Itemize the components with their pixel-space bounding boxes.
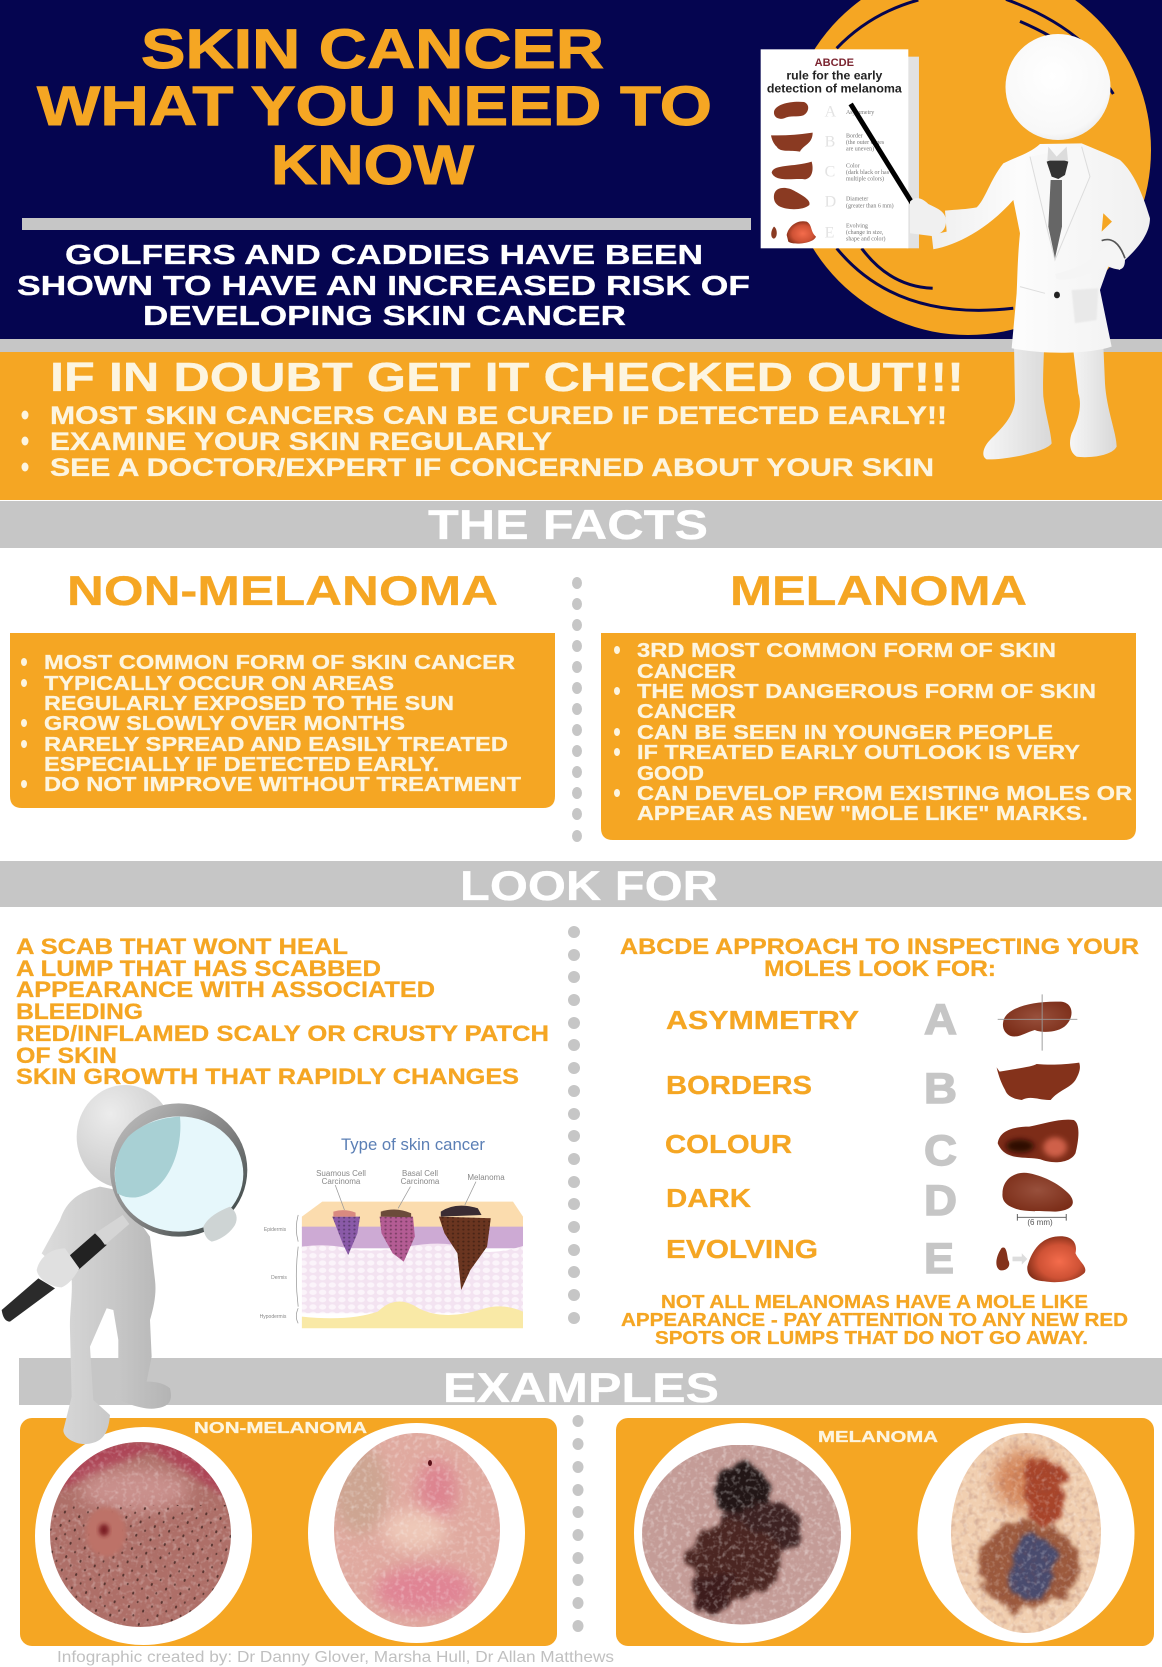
heading: abcde approach: MOLES LOOK FOR: — [764, 956, 996, 981]
panel: melanoma facts: 3RD MOST COMMON FORM OF SKIN — [637, 639, 1056, 662]
advice bullets: EXAMINE YOUR SKIN REGULARLY — [50, 428, 552, 456]
magnifier handle — [2, 1215, 129, 1322]
dotted divider: look for — [568, 926, 580, 1324]
heading: abcde approach — [620, 934, 1139, 981]
heading: non-melanoma: NON-MELANOMA — [67, 567, 498, 614]
diagram labels: Epidermis — [264, 1227, 287, 1233]
section bar: look for — [0, 861, 1162, 909]
panel: if in doubt — [0, 352, 1162, 500]
magnifier lens — [115, 1116, 243, 1232]
photo frame 3 — [634, 1423, 851, 1643]
advice bullets — [22, 402, 947, 482]
panel: melanoma facts: CANCER — [637, 700, 736, 723]
ABCDE chart held by doctor: (the outer edges — [846, 139, 885, 146]
ABCDE chart held by doctor: Diameter — [846, 197, 868, 203]
text block: signs to look for: APPEARANCE WITH ASSOCIATED — [16, 977, 435, 1002]
title: WHAT YOU NEED TO — [37, 74, 712, 137]
section bar: examples — [19, 1358, 1162, 1411]
label: melanoma: MELANOMA — [818, 1429, 938, 1446]
text block: signs to look for — [16, 934, 549, 1089]
ABCDE chart held by doctor: (change in size, — [846, 229, 884, 236]
doctor head — [1006, 34, 1110, 140]
panel: melanoma facts: IF TREATED EARLY OUTLOOK IS VERY — [637, 741, 1080, 764]
abcde row: borders: B — [924, 1065, 957, 1113]
note: not all melanomas: NOT ALL MELANOMAS HAVE A MOLE LIKE — [661, 1292, 1088, 1312]
subtitle: SHOWN TO HAVE AN INCREASED RISK OF — [17, 270, 750, 301]
figure: person with magnifying glass — [2, 1085, 247, 1444]
dotted divider: facts — [572, 577, 582, 842]
panel: non-melanoma facts: REGULARLY EXPOSED TO THE SUN — [44, 692, 454, 715]
abcde row: asymmetry: A — [924, 996, 957, 1044]
abcde row: asymmetry — [666, 994, 1077, 1051]
ABCDE chart held by doctor: Evolving — [846, 223, 868, 229]
note: not all melanomas: SPOTS OR LUMPS THAT DO NOT GO AWAY. — [655, 1328, 1088, 1348]
pointer stick — [851, 104, 913, 204]
panel: melanoma facts: APPEAR AS NEW "MOLE LIKE" MARKS. — [637, 802, 1088, 825]
panel: non-melanoma facts: ESPECIALLY IF DETECTED EARLY. — [44, 753, 439, 776]
label: non-melanoma: NON-MELANOMA — [194, 1420, 367, 1437]
section bar: examples: EXAMPLES — [443, 1364, 719, 1411]
figure hand holding handle — [37, 1248, 79, 1287]
heading: if in doubt: IF IN DOUBT GET IT CHECKED OUT!!! — [50, 354, 964, 400]
subtitle: GOLFERS AND CADDIES HAVE BEEN — [65, 239, 703, 270]
ABCDE chart held by doctor: (greater than 6 mm) — [846, 202, 894, 209]
advice bullets: SEE A DOCTOR/EXPERT IF CONCERNED ABOUT YOUR SKIN — [50, 454, 934, 482]
subtitle — [17, 239, 750, 331]
ABCDE chart held by doctor: E — [825, 224, 834, 241]
figure head — [77, 1085, 173, 1188]
abcde row: borders — [666, 1063, 1080, 1113]
panel: non-melanoma facts: TYPICALLY OCCUR ON AREAS — [44, 672, 394, 695]
diagram title: Type of skin cancer — [341, 1135, 485, 1154]
panel: non-melanoma facts: RARELY SPREAD AND EASILY TREATED — [44, 733, 508, 756]
ABCDE chart held by doctor: rule for the early — [786, 68, 883, 82]
diagram labels: Carcinoma — [322, 1177, 361, 1186]
divider strip — [0, 339, 1162, 352]
heading: abcde approach: ABCDE APPROACH TO INSPECTING YOUR — [620, 934, 1139, 959]
ABCDE chart held by doctor: detection of melanoma — [767, 82, 902, 96]
text block: signs to look for: BLEEDING — [16, 999, 143, 1024]
magnifier rim — [110, 1103, 247, 1237]
ABCDE chart held by doctor: Asymmetry — [846, 110, 874, 116]
photo frame 4 — [918, 1423, 1134, 1643]
ABCDE chart held by doctor: B — [825, 134, 835, 151]
figure body — [42, 1187, 171, 1444]
doctor hands — [910, 198, 946, 236]
panel: non-melanoma facts — [10, 633, 555, 808]
diagram labels: Basal Cell — [402, 1169, 438, 1178]
photo: non-melanoma red patch — [332, 1433, 500, 1627]
ABCDE chart held by doctor: shape and color) — [846, 236, 886, 243]
abcde row: asymmetry: ASYMMETRY — [666, 1005, 859, 1035]
head seen through lens — [115, 1117, 180, 1198]
title: SKIN CANCER — [141, 17, 604, 80]
text block: signs to look for: RED/INFLAMED SCALY OR CRUSTY PATCH — [16, 1021, 549, 1046]
advice bullets: MOST SKIN CANCERS CAN BE CURED IF DETECTED EARLY!! — [50, 402, 947, 430]
ABCDE chart held by doctor — [761, 49, 919, 248]
text block: signs to look for: SKIN GROWTH THAT RAPIDLY CHANGES — [16, 1064, 519, 1089]
diagram labels: Suamous Cell — [316, 1169, 366, 1178]
abcde row: dark: DARK — [666, 1183, 751, 1213]
panel: non-melanoma facts: GROW SLOWLY OVER MONTHS — [44, 712, 405, 735]
note: not all melanomas: APPEARANCE - PAY ATTENTION TO ANY NEW RED — [621, 1310, 1128, 1330]
ABCDE chart held by doctor: A — [825, 104, 837, 121]
abcde row: colour — [665, 1120, 1078, 1175]
abcde row: evolving: E — [924, 1235, 954, 1283]
panel: non-melanoma facts: MOST COMMON FORM OF SKIN CANCER — [44, 651, 515, 674]
diagram labels — [260, 1169, 505, 1320]
panel: melanoma examples — [616, 1418, 1154, 1646]
panel: non-melanoma facts: DO NOT IMPROVE WITHOUT TREATMENT — [44, 773, 522, 796]
abcde row: evolving: EVOLVING — [666, 1234, 818, 1264]
ABCDE chart held by doctor: D — [825, 194, 836, 211]
chart: skin cross-section diagram — [260, 1135, 523, 1328]
abcde row: colour: C — [924, 1127, 957, 1175]
note: not all melanomas — [621, 1292, 1128, 1348]
diagram labels: Dermis — [271, 1275, 287, 1281]
section bar: the facts — [0, 501, 1162, 548]
abcde row: colour: COLOUR — [665, 1129, 792, 1159]
photo: non-melanoma lesion on stubbled skin — [50, 1442, 231, 1627]
panel: melanoma facts: CAN BE SEEN IN YOUNGER PEOPLE — [637, 721, 1053, 744]
diagram labels: Melanoma — [467, 1173, 505, 1182]
abcde row: dark — [666, 1173, 1073, 1227]
figure fingers on lens — [203, 1207, 237, 1242]
ABCDE chart held by doctor: ABCDE — [815, 57, 854, 69]
ABCDE chart held by doctor: Border — [846, 133, 863, 139]
panel: melanoma facts: THE MOST DANGEROUS FORM OF SKIN — [637, 680, 1096, 703]
photo: melanoma dark lesion — [642, 1445, 842, 1625]
orange circle backdrop — [785, 0, 1151, 335]
doctor legs — [983, 343, 1117, 459]
panel: melanoma facts: GOOD — [637, 762, 704, 785]
dotted divider: examples — [572, 1415, 584, 1632]
diagram labels: Hypodermis — [260, 1314, 287, 1320]
navy decorative arcs — [837, 0, 1113, 310]
abcde row: dark: (6 mm) — [1027, 1218, 1053, 1227]
header divider bar — [22, 218, 751, 230]
abcde row: dark: D — [924, 1177, 957, 1225]
doctor torso and arms — [851, 104, 1150, 353]
ABCDE chart held by doctor: C — [825, 164, 835, 181]
figure: doctor with pointer — [851, 34, 1150, 459]
ABCDE chart held by doctor: are uneven) — [846, 146, 874, 153]
photo frame 2 — [308, 1423, 525, 1643]
heading: melanoma: MELANOMA — [730, 567, 1027, 614]
abcde row: evolving — [666, 1234, 1085, 1283]
subtitle: DEVELOPING SKIN CANCER — [143, 300, 626, 331]
diagram labels: Carcinoma — [401, 1177, 440, 1186]
panel: non-melanoma examples — [20, 1418, 557, 1646]
photo frame 1 — [35, 1427, 252, 1645]
ABCDE chart held by doctor: multiple colors) — [846, 176, 884, 183]
panel: header — [0, 0, 1162, 339]
text block: signs to look for: A SCAB THAT WONT HEAL — [16, 934, 348, 959]
section bar: look for: LOOK FOR — [460, 862, 718, 909]
abcde row: borders: BORDERS — [666, 1070, 812, 1100]
title — [37, 17, 712, 196]
panel: melanoma facts: CAN DEVELOP FROM EXISTING MOLES OR — [637, 782, 1132, 805]
title: KNOW — [271, 133, 474, 196]
ABCDE chart held by doctor: Color — [846, 163, 860, 169]
panel: melanoma facts — [601, 633, 1136, 840]
ABCDE chart held by doctor: (dark black or has — [846, 169, 890, 176]
panel: melanoma facts: CANCER — [637, 660, 736, 683]
text block: signs to look for: A LUMP THAT HAS SCABBED — [16, 956, 381, 981]
photo: melanoma blue-brown lesion — [951, 1433, 1101, 1633]
text block: signs to look for: OF SKIN — [16, 1043, 117, 1068]
footer credit: Infographic created by: Dr Danny Glover, Marsha Hull, Dr Allan Matthews — [57, 1649, 614, 1666]
section bar: the facts: THE FACTS — [428, 501, 708, 548]
